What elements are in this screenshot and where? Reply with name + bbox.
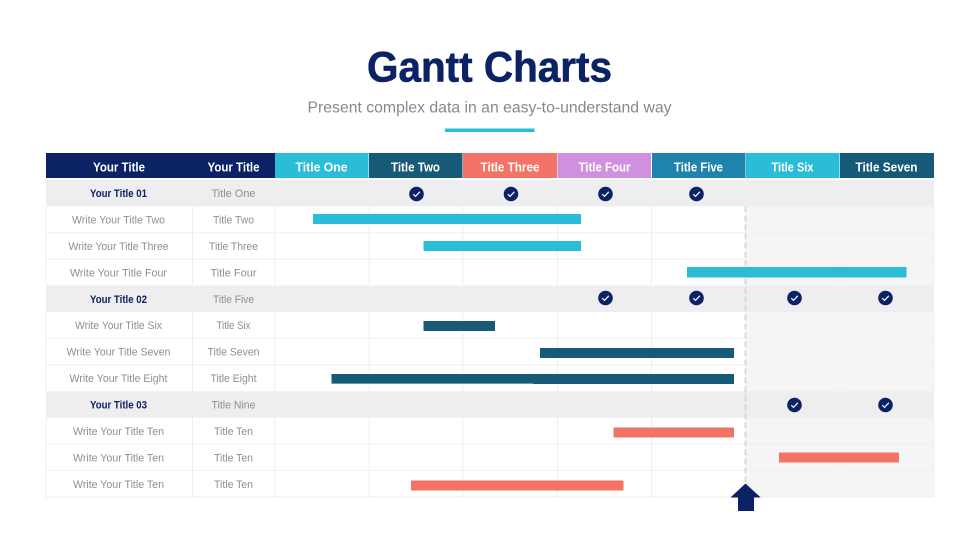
row labels: first column xyxy=(66,188,170,491)
row labels: second column: Title Ten xyxy=(214,479,253,491)
header row: Title Four xyxy=(578,160,631,174)
header row: Title One xyxy=(296,160,348,174)
teal task bars xyxy=(332,321,734,384)
today marker arrow xyxy=(730,484,761,511)
row labels: first column: Write Your Title Three xyxy=(68,241,168,253)
header row xyxy=(46,153,934,178)
subtitle: Present complex data in an easy-to-understand way xyxy=(308,100,672,116)
today marker dashed line xyxy=(744,206,746,484)
row labels: first column: Your Title 02 xyxy=(90,294,147,306)
shaded future area xyxy=(746,206,934,497)
row labels: second column: Title Six xyxy=(216,320,251,332)
row labels: first column: Write Your Title Six xyxy=(75,320,162,332)
row labels: first column: Write Your Title Two xyxy=(72,214,165,226)
title accent line xyxy=(445,128,534,132)
row labels: first column: Write Your Title Ten xyxy=(73,479,164,491)
row labels: first column: Write Your Title Eight xyxy=(70,373,168,385)
row labels: first column: Write Your Title Ten xyxy=(73,426,164,438)
header row: Title Seven xyxy=(856,160,918,174)
group row backgrounds xyxy=(46,180,934,418)
row labels: second column: Title Two xyxy=(213,214,254,226)
row labels: first column: Write Your Title Seven xyxy=(66,346,170,358)
title: Gantt Charts xyxy=(367,44,612,92)
row labels: second column: Title Eight xyxy=(210,373,256,385)
gantt table xyxy=(46,153,934,511)
row labels: second column xyxy=(208,188,260,491)
row labels: first column: Write Your Title Ten xyxy=(73,452,164,464)
row labels: second column: Title Three xyxy=(209,241,258,253)
row labels: second column: Title Nine xyxy=(212,400,256,412)
header row: Title Two xyxy=(391,160,440,174)
header row: Your Title xyxy=(93,160,145,174)
row labels: second column: Title Four xyxy=(210,268,257,280)
row labels: first column: Write Your Title Four xyxy=(70,268,167,280)
row labels: second column: Title One xyxy=(212,188,256,200)
header row: Title Three xyxy=(480,160,540,174)
coral task bars xyxy=(411,428,899,490)
header row: Your Title xyxy=(208,160,260,174)
row labels: second column: Title Ten xyxy=(214,426,253,438)
row labels: second column: Title Seven xyxy=(208,346,260,358)
row labels: first column: Your Title 03 xyxy=(90,400,147,412)
row labels: second column: Title Ten xyxy=(214,452,253,464)
row labels: first column: Your Title 01 xyxy=(90,188,147,200)
cyan task bars xyxy=(313,214,906,278)
row labels: second column: Title Five xyxy=(213,294,254,306)
header row: Title Six xyxy=(772,160,814,174)
header row: Title Five xyxy=(674,160,723,174)
milestone check icons xyxy=(409,187,893,412)
